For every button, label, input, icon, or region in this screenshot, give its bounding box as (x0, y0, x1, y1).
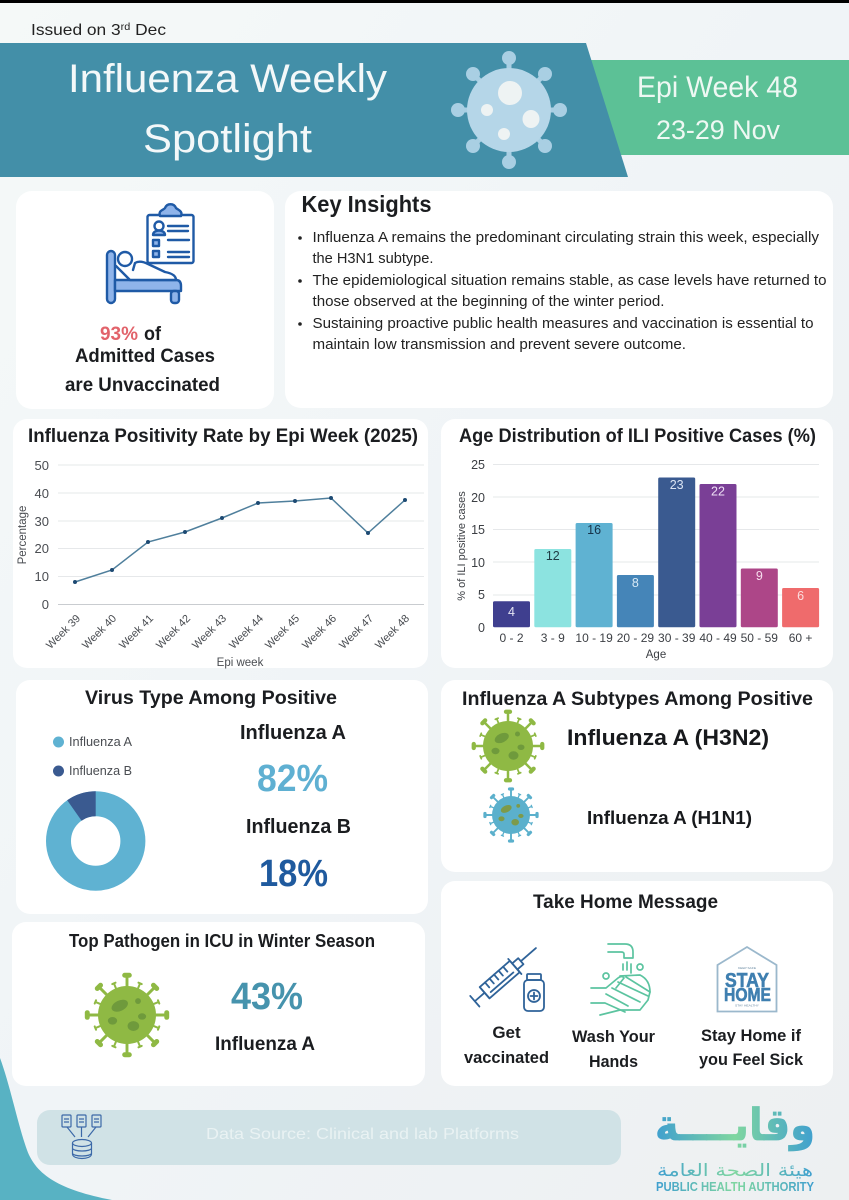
bar chart: Age (646, 649, 666, 661)
donut chart (58, 791, 133, 878)
bar chart: 23 (670, 478, 684, 492)
bar chart: 3 - 9 (541, 631, 565, 645)
bar chart: 9 (756, 569, 763, 583)
panel: top pathogen (12, 922, 425, 1086)
bar chart: 20 - 29 (617, 631, 654, 645)
bar chart: 5 (478, 588, 485, 602)
label line 2: you Feel Sick (699, 1050, 804, 1069)
panel: key insights (285, 191, 833, 408)
bar chart: 20 (471, 491, 485, 505)
data source bar (37, 1110, 621, 1165)
header banner (0, 43, 628, 177)
bar chart: 0 (478, 621, 485, 635)
bar chart: 22 (711, 484, 725, 498)
insight text (312, 229, 826, 353)
line chart: 30 (35, 514, 49, 529)
bar chart: 4 (508, 605, 515, 619)
panel: subtypes (441, 680, 833, 872)
bar chart: 8 (632, 576, 639, 590)
insight text: Influenza A remains the predominant circulating strain this week, especially (312, 229, 819, 246)
bar chart: 12 (546, 549, 560, 563)
icon: stay home house: KEEP SAFE (738, 966, 756, 970)
line chart: Percentage (17, 506, 29, 564)
label: get vaccinated: Get (492, 1023, 521, 1042)
stat label line 2: Admitted Cases (75, 346, 215, 367)
icon: patient in bed with chart (107, 204, 194, 303)
bar chart: 16 (587, 523, 601, 537)
bar chart: 30 - 39 (658, 631, 696, 645)
line chart (17, 458, 424, 669)
epi week label: Epi Week 48 (637, 71, 798, 104)
insight text: Sustaining proactive public health measures and vaccination is essential to (312, 315, 814, 332)
legend: Influenza A (69, 735, 133, 749)
heading: age distribution: Age Distribution of ILI Positive Cases (%) (459, 426, 816, 447)
line chart: Week 45 (263, 613, 302, 652)
issue date: rd (121, 22, 130, 33)
line chart: Week 40 (80, 613, 119, 652)
heading: positivity rate: Influenza Positivity Rate by Epi Week (2025) (28, 426, 418, 447)
heading: top pathogen: Top Pathogen in ICU in Winter Season (69, 931, 375, 951)
epi week ribbon (590, 60, 849, 155)
bar chart: % of ILI positive cases (456, 491, 468, 601)
stat label: of: of (144, 324, 162, 345)
line chart: 40 (35, 486, 49, 501)
heading: subtypes: Influenza A Subtypes Among Positive (462, 689, 813, 710)
bar chart: 10 (471, 556, 485, 570)
line chart: Week 46 (300, 613, 339, 652)
icon: syringe and vial (468, 941, 544, 1011)
label: stay home: Stay Home if (701, 1026, 801, 1045)
line chart: Epi week (217, 657, 264, 669)
stat: 82 percent: 82% (257, 758, 328, 800)
bar chart: 15 (471, 523, 485, 537)
icon: stay home house: HOME (724, 985, 771, 1005)
icon: blue virus (485, 789, 537, 841)
title line 2: Spotlight (143, 117, 312, 161)
issue date: Dec (130, 22, 166, 39)
stat: 93 percent: 93% (100, 324, 138, 345)
label: influenza B: Influenza B (246, 816, 351, 838)
logo: public health authority: وقايــــة (655, 1100, 815, 1151)
insight text: The epidemiological situation remains stable, as case levels have returned to (312, 272, 826, 289)
line chart: Week 41 (117, 613, 156, 652)
panel: admitted cases (16, 191, 274, 409)
label: influenza A: Influenza A (215, 1034, 315, 1055)
label: H1N1: Influenza A (H1N1) (587, 808, 752, 828)
line chart: Week 42 (154, 613, 193, 652)
line chart: Week 48 (373, 613, 412, 652)
legend: Influenza B (69, 764, 132, 778)
bar chart: 0 - 2 (499, 631, 524, 645)
icon: washing hands (591, 944, 650, 1015)
line chart: Week 39 (44, 613, 83, 652)
label: wash your hands: Wash Your (572, 1027, 655, 1046)
legend (53, 735, 133, 778)
insight text: those observed at the beginning of the winter period. (312, 293, 664, 310)
logo: public health authority (655, 1100, 815, 1194)
icon: green virus (87, 975, 167, 1055)
heading: key insights: Key Insights (302, 191, 432, 217)
bar chart: 6 (797, 589, 804, 603)
heading: take home message: Take Home Message (533, 892, 718, 913)
label: influenza A: Influenza A (240, 722, 346, 744)
title: Influenza Weekly (68, 57, 387, 101)
bar chart: 60 + (789, 631, 812, 645)
panel: positivity rate (13, 419, 428, 669)
stat: 18 percent: 18% (259, 853, 328, 895)
line chart: Week 43 (190, 613, 229, 652)
insight text: maintain low transmission and prevent severe outcome. (312, 336, 686, 353)
top black edge (0, 0, 849, 3)
panel: virus type (16, 680, 428, 914)
line chart: 0 (42, 597, 49, 612)
icon: database with documents (62, 1115, 101, 1158)
line chart: Week 44 (227, 613, 266, 652)
bullets (298, 236, 302, 326)
icon: stay home house (718, 947, 776, 1012)
line chart: Week 47 (337, 613, 376, 652)
line chart: 10 (35, 569, 49, 584)
icon: green virus (474, 712, 542, 780)
insight text: the H3N1 subtype. (312, 250, 434, 267)
line chart: 20 (35, 541, 49, 556)
issue date: Issued on 3 (31, 22, 114, 39)
stat label line 3: are Unvaccinated (65, 375, 220, 396)
date range: 23-29 Nov (656, 115, 780, 145)
icon: stay home house: STAY HEALTHY (735, 1004, 759, 1008)
logo: public health authority: PUBLIC HEALTH AUTHORITY (656, 1179, 814, 1194)
label: H3N2: Influenza A (H3N2) (567, 725, 769, 750)
label line 2: vaccinated (464, 1048, 549, 1067)
logo: public health authority: هيئة الصحة العامة (657, 1161, 813, 1181)
bar chart: 40 - 49 (699, 631, 737, 645)
stat: 43 percent: 43% (231, 976, 303, 1018)
panel: take home message (441, 881, 833, 1086)
bar chart: 25 (471, 458, 485, 472)
line chart: 50 (35, 458, 49, 473)
bar chart (456, 458, 819, 661)
data source text: Data Source: Clinical and lab Platforms (206, 1126, 519, 1143)
teal corner shape (0, 1058, 112, 1200)
icon: header virus (451, 51, 567, 169)
heading: virus type: Virus Type Among Positive (85, 688, 337, 709)
icon: stay home house: STAY (725, 970, 770, 992)
label line 2: Hands (589, 1052, 638, 1071)
panel: age distribution (441, 419, 833, 668)
bar chart: 50 - 59 (741, 631, 778, 645)
bar chart: 10 - 19 (575, 631, 613, 645)
